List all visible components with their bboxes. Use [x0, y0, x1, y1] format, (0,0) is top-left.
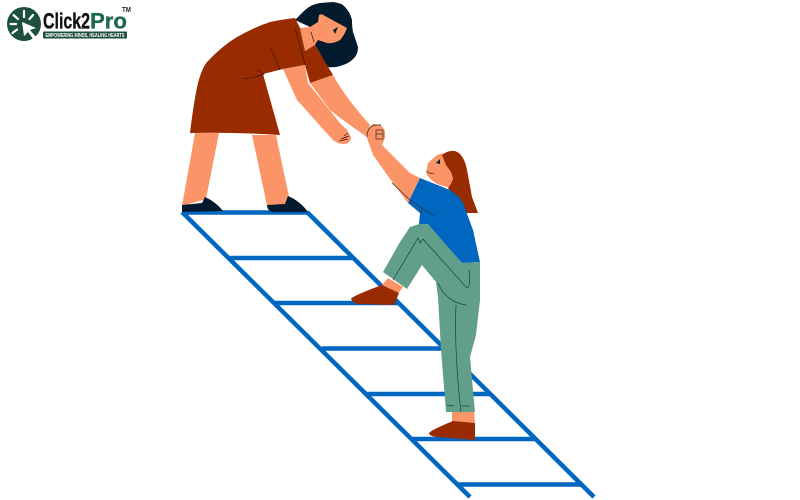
shirt [408, 178, 480, 263]
eye [436, 159, 440, 164]
lower ankle [452, 410, 475, 424]
head and neck [300, 14, 347, 51]
lower shoe [429, 421, 475, 440]
head [426, 153, 453, 188]
hair [295, 2, 358, 67]
trademark: TM [122, 5, 131, 14]
raised foot shoe [351, 285, 399, 305]
logo wordmark: Click2 [43, 8, 90, 34]
hand and face lines [367, 125, 434, 216]
raised foot ankle [382, 278, 403, 294]
figure: climbing woman [351, 124, 480, 440]
shoes [182, 196, 308, 212]
logo wordmark accent: Pro [90, 8, 127, 34]
icon: click burst [7, 7, 41, 41]
dress fold lines [243, 28, 349, 141]
logo tagline banner: EMPOWERING MINDS, HEALING HEARTS [46, 33, 125, 39]
legs [182, 133, 289, 206]
figure: helping woman [182, 2, 370, 212]
trousers [383, 224, 480, 412]
reaching arm and hand [367, 124, 420, 203]
dress [190, 18, 333, 135]
trouser lines [393, 238, 470, 412]
far arm [310, 75, 370, 137]
face detail [333, 27, 338, 34]
logo: Click2Pro [7, 5, 131, 41]
hair [442, 151, 478, 213]
near arm and hand [283, 65, 351, 144]
ladder [182, 212, 594, 497]
